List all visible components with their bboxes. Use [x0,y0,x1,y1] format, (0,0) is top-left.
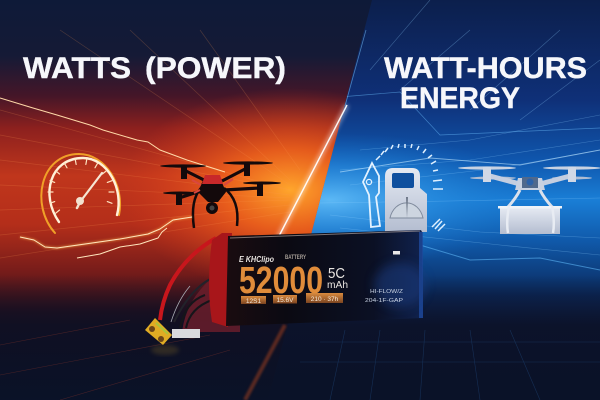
battery brand label: E KHClipo [239,255,274,264]
heading: watt-hours: WATT-HOURS [384,52,587,85]
spec badge: power: 210 · 37h [311,296,339,303]
icon: white delivery drone [458,166,600,234]
spec badge: voltage [273,295,297,304]
heading: watts power: (POWER) [145,52,286,85]
icon: fuel pump and energy gauge [363,144,445,232]
spec badge: cells [241,296,266,305]
battery small spec lines two: 204-1F-GAP [365,298,403,304]
battery discharge rating: 5C [328,265,345,282]
battery capacity number: 52000 [239,260,323,302]
spec badge: power [306,293,343,303]
lightning bolts [20,217,192,258]
heading: watts power: WATTS [23,52,131,85]
spec badge: cells: 12S1 [246,298,261,305]
heading: watts power [23,52,286,85]
icon: battery cables and connector [145,238,240,355]
icon: black quadcopter drone [160,161,281,228]
battery type label: BATTERY [285,255,306,261]
heading: energy: ENERGY [400,82,520,115]
icon: speedometer gauge [41,154,120,233]
battery mah unit: mAh [327,280,348,291]
divider: diagonal light beam [278,30,366,238]
spec badge: voltage: 15.6V [276,297,294,304]
battery small spec lines: HI-FLOW/Z [370,289,404,295]
floor [0,275,600,400]
battery pack [209,230,426,327]
panel: left red background [0,0,372,324]
battery status icon [393,251,400,254]
